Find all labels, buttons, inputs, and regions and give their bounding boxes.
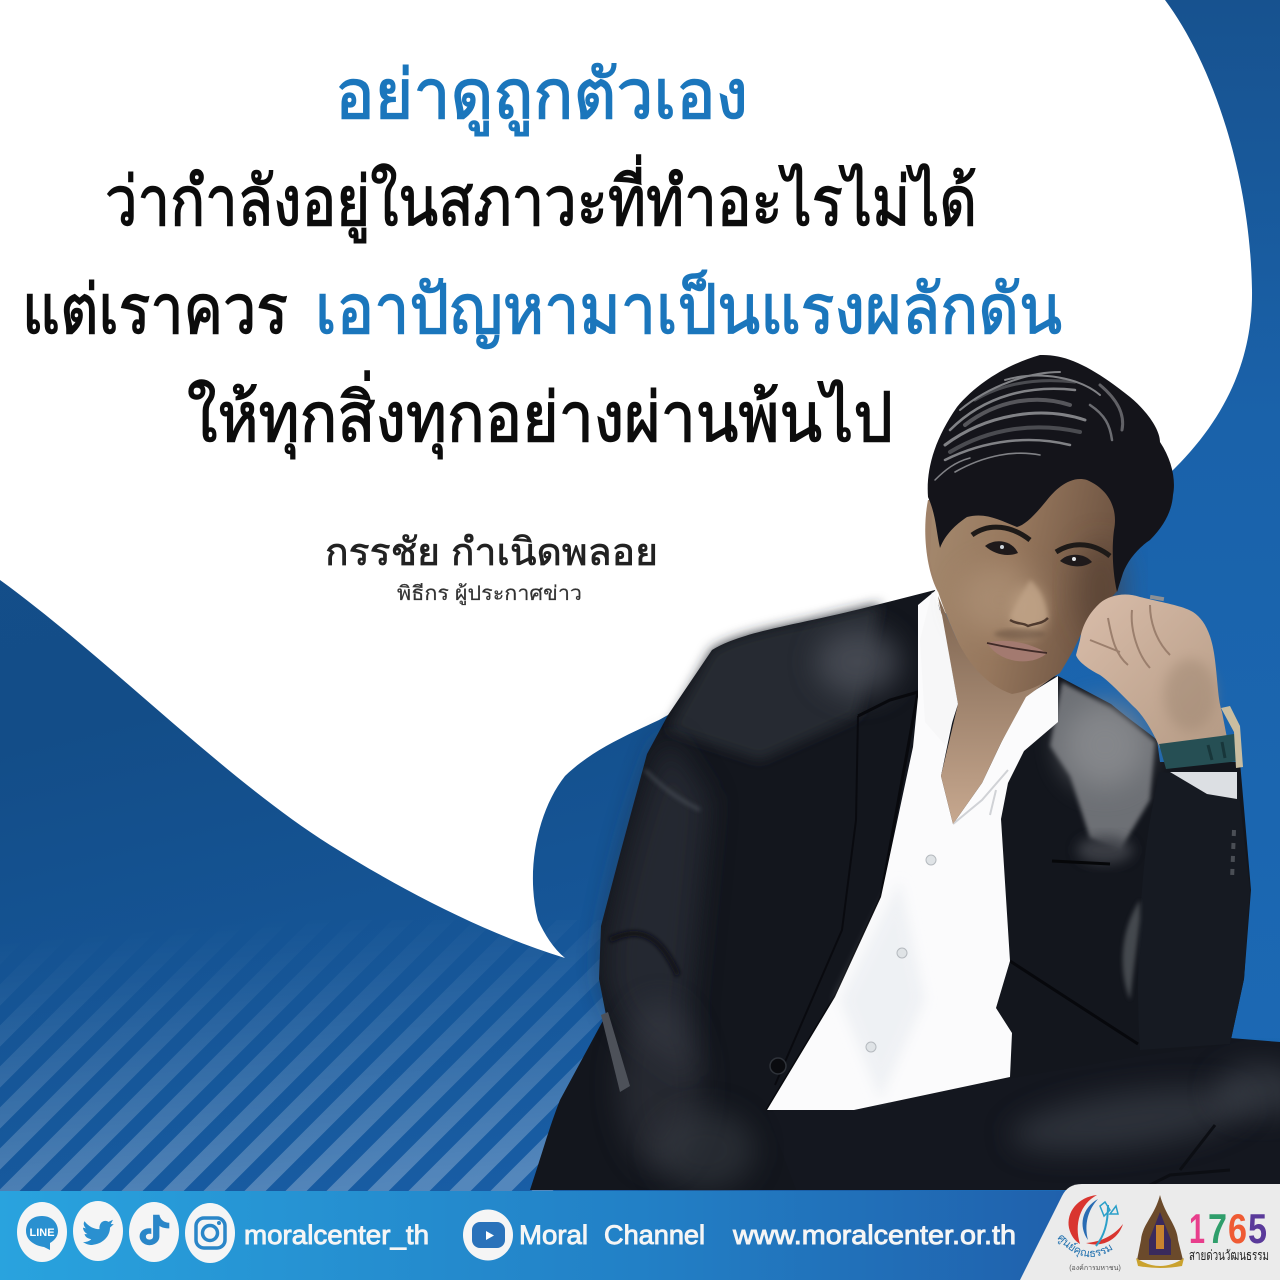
face [930, 470, 1124, 694]
right chest highlight [1050, 682, 1155, 850]
trousers [740, 1036, 1280, 1190]
quote line 1: อย่าดูถูกตัวเอง [335, 57, 748, 136]
nose [1010, 580, 1048, 626]
website: www.moralcenter.or.th [732, 1220, 1016, 1250]
gray side strip [601, 1012, 630, 1092]
ear [925, 500, 948, 592]
mouth [987, 641, 1047, 661]
blue background right side [900, 0, 1280, 1200]
logo: moral center [1058, 1195, 1123, 1272]
logo: moral center: (องค์การมหาชน) [1069, 1264, 1121, 1272]
quote line 4: ให้ทุกสิ่งทุกอย่างผ่านพ้นไป [187, 371, 893, 459]
man in black suit [530, 355, 1280, 1190]
diagonal stripes [0, 938, 606, 1191]
shirt collar [920, 592, 958, 745]
speaker name: กรรชัย กำเนิดพลอย [325, 532, 658, 574]
quote text [22, 57, 1062, 459]
shoulder highlight left [668, 604, 880, 760]
white shirt [767, 590, 1058, 1110]
white speech bubble [0, 0, 1252, 958]
lapel edges [767, 692, 918, 1110]
shirt cuff [1170, 772, 1237, 799]
eyebrows [972, 527, 1030, 540]
logo: 1765: 5 [1248, 1205, 1267, 1252]
hair [928, 355, 1174, 592]
icon: line [17, 1202, 67, 1262]
icon: youtube [463, 1210, 513, 1260]
neck [938, 596, 1060, 824]
logo: moral center: ศูนย์คุณธรรม [1058, 1235, 1112, 1258]
jacket [530, 590, 1251, 1190]
icon: line: LINE [29, 1227, 55, 1239]
youtube channel name: Moral [519, 1220, 588, 1250]
logo: 1765 [1189, 1205, 1267, 1252]
icon: instagram [185, 1203, 235, 1263]
moustache shade [994, 629, 1046, 639]
sleeve buttons [1232, 830, 1234, 880]
logo: 1765: 7 [1208, 1205, 1227, 1252]
hand on cheek [1076, 595, 1227, 748]
watch [1159, 706, 1243, 769]
icon: tiktok [129, 1202, 179, 1262]
eyes [985, 541, 1018, 555]
quote line 3 black part: แต่เราควร [22, 272, 288, 348]
logo: 1765: 6 [1228, 1205, 1247, 1252]
quote line 3 blue part: เอาปัญหามาเป็นแรงผลักดัน [315, 270, 1062, 348]
icon: twitter [73, 1201, 123, 1261]
quote line 2: ว่ากำลังอยู่ในสภาวะที่ทำอะไรไม่ได้ [105, 155, 977, 243]
jacket button [770, 1058, 786, 1074]
right forearm shade [1138, 772, 1250, 1050]
sleeve highlights [606, 735, 710, 1080]
logo panel [1020, 1184, 1280, 1280]
logo: ministry temple emblem [1136, 1195, 1184, 1268]
speaker role: พิธีกร ผู้ประกาศข่าว [397, 583, 582, 606]
pocket line [1052, 861, 1110, 864]
youtube channel name: Channel [604, 1220, 705, 1250]
footer bar [0, 1191, 1280, 1280]
logo: 1765: 1 [1189, 1205, 1205, 1252]
social handle: moralcenter_th [244, 1220, 429, 1250]
